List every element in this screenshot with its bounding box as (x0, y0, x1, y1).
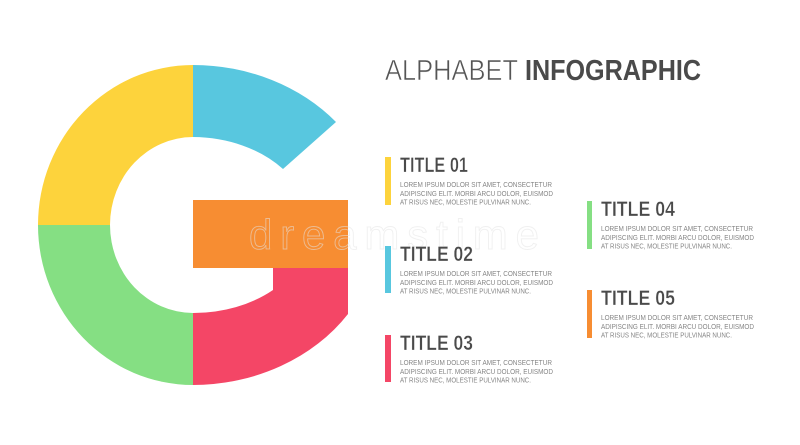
segment: pink (193, 268, 348, 385)
body text: ADIPISCING ELIT. MORBI ARCU DOLOR, EUISMOD (601, 322, 754, 331)
block: title 04 (587, 198, 754, 250)
body text: AT RISUS NEC, MOLESTIE PULVINAR NUNC. (601, 242, 732, 250)
body text: LOREM IPSUM DOLOR SIT AMET, CONSECTETUR (601, 313, 753, 322)
accent bar (385, 157, 391, 205)
body text: AT RISUS NEC, MOLESTIE PULVINAR NUNC. (400, 376, 531, 384)
body text: ADIPISCING ELIT. MORBI ARCU DOLOR, EUISMOD (400, 278, 553, 287)
body text: ADIPISCING ELIT. MORBI ARCU DOLOR, EUISMOD (400, 189, 553, 198)
heading: TITLE 02 (400, 243, 473, 266)
letter G chart (38, 65, 348, 385)
body text: LOREM IPSUM DOLOR SIT AMET, CONSECTETUR (400, 269, 552, 278)
body text: LOREM IPSUM DOLOR SIT AMET, CONSECTETUR (400, 180, 552, 189)
heading: TITLE 01 (400, 154, 468, 177)
heading: TITLE 05 (601, 287, 675, 310)
body text: LOREM IPSUM DOLOR SIT AMET, CONSECTETUR (601, 224, 753, 233)
body text: AT RISUS NEC, MOLESTIE PULVINAR NUNC. (400, 198, 531, 206)
accent bar (385, 246, 391, 293)
block: title 03 (385, 332, 553, 384)
block: title 01 (385, 154, 553, 206)
accent bar (587, 290, 592, 338)
segment: cyan (193, 65, 336, 169)
body text: AT RISUS NEC, MOLESTIE PULVINAR NUNC. (601, 330, 732, 340)
accent bar (385, 335, 391, 382)
main heading: INFOGRAPHIC (525, 55, 701, 87)
watermark: dreamstime (249, 211, 539, 258)
body text: ADIPISCING ELIT. MORBI ARCU DOLOR, EUISMOD (400, 367, 553, 376)
block: title 05 (587, 287, 754, 340)
main heading (385, 55, 701, 87)
segment: green (38, 225, 193, 385)
body text: AT RISUS NEC, MOLESTIE PULVINAR NUNC. (400, 286, 531, 296)
heading: TITLE 03 (400, 332, 473, 355)
accent bar (587, 201, 592, 249)
block: title 02 (385, 243, 553, 296)
body text: LOREM IPSUM DOLOR SIT AMET, CONSECTETUR (400, 358, 552, 367)
segment: orange (193, 200, 348, 268)
segment: yellow (38, 65, 193, 225)
body text: ADIPISCING ELIT. MORBI ARCU DOLOR, EUISMOD (601, 233, 754, 242)
heading: TITLE 04 (601, 198, 675, 221)
main heading: ALPHABET (385, 55, 518, 87)
